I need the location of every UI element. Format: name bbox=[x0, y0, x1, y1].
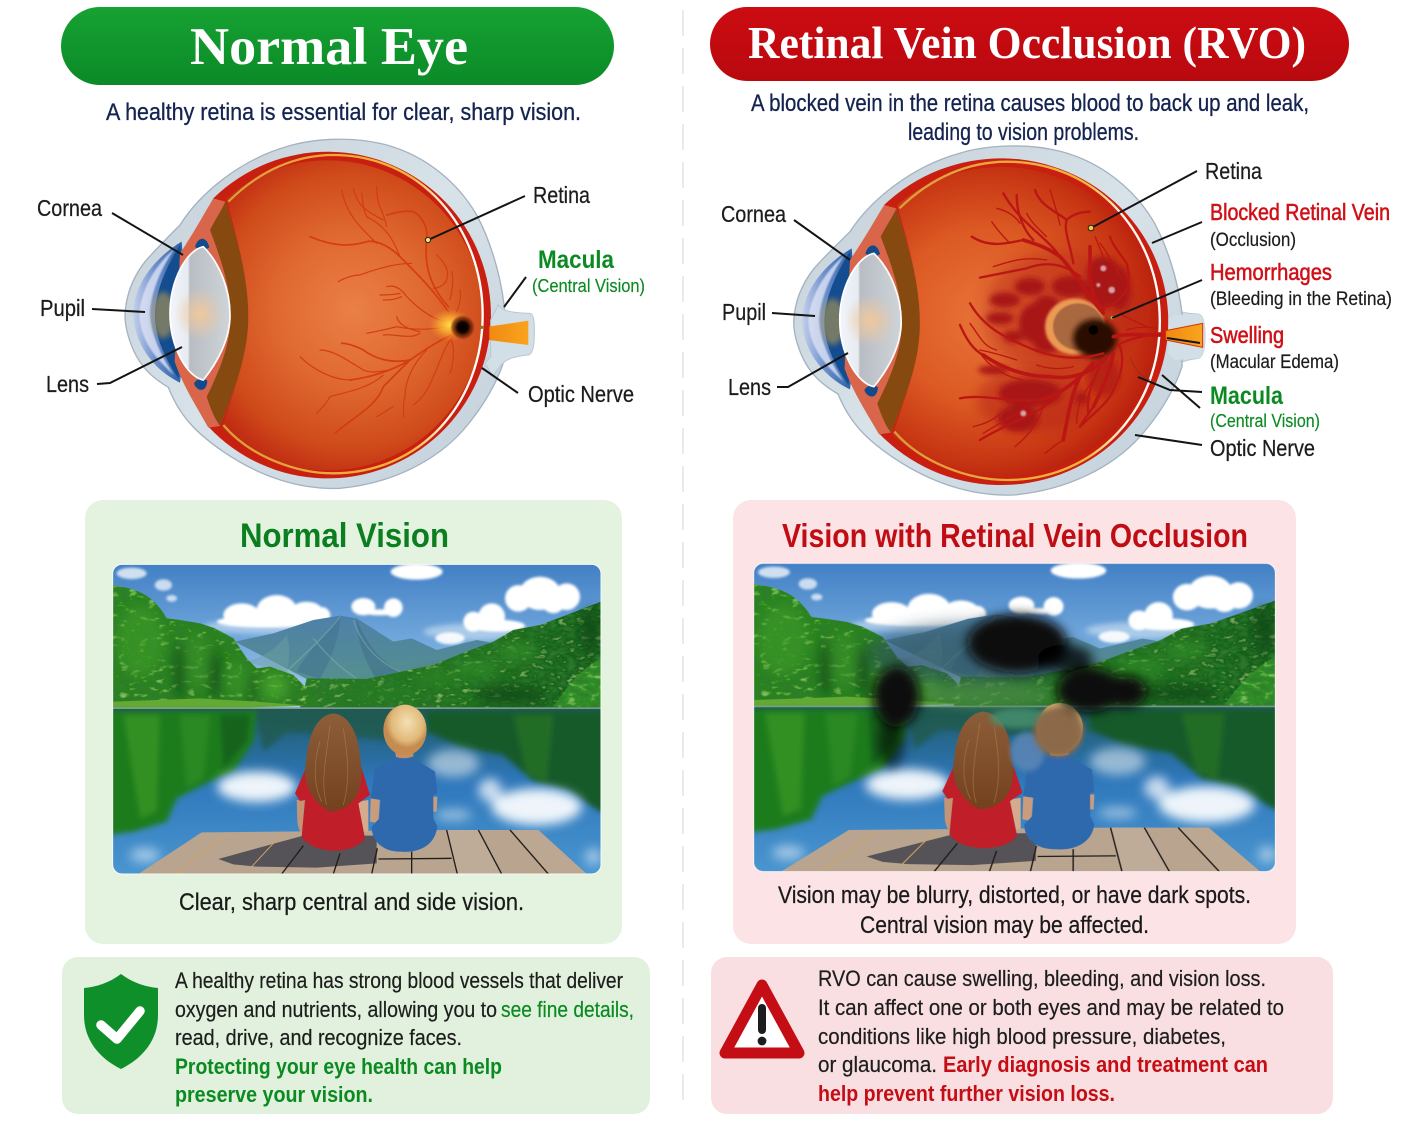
labels: normal eye bbox=[37, 182, 645, 407]
macular edema patch bbox=[1045, 299, 1117, 358]
subtitle: RVO: leading to vision problems. bbox=[908, 119, 1139, 146]
caption: Central vision may be affected. bbox=[860, 912, 1149, 939]
labels: RVO eye bbox=[721, 158, 1392, 461]
subtitle: normal eye: A healthy retina is essential for clear, sharp vision. bbox=[106, 99, 581, 126]
title: Normal Eye: Normal Eye bbox=[190, 18, 468, 76]
label: Cornea bbox=[721, 201, 850, 260]
icon: green shield with check bbox=[84, 974, 158, 1069]
label: Retina: Retina bbox=[1205, 158, 1262, 184]
callout: RVO warning bbox=[711, 957, 1333, 1114]
text block: conditions like high blood pressure, diabetes, bbox=[818, 1024, 1226, 1049]
label: Blocked Retinal Vein bbox=[1152, 199, 1390, 251]
text block: Protecting your eye health can help bbox=[175, 1054, 502, 1079]
label: Lens: Lens bbox=[46, 371, 89, 397]
optic nerve stump bbox=[485, 305, 534, 377]
diagram: normal eye cross-section bbox=[125, 139, 534, 488]
label: Macula bbox=[504, 246, 645, 307]
text block: RVO can cause swelling, bleeding, and vision loss. bbox=[818, 966, 1266, 991]
caption: Clear, sharp central and side vision. bbox=[179, 889, 524, 916]
red halo bbox=[983, 250, 1143, 377]
macula bbox=[428, 308, 475, 342]
heading: Vision with Retinal Vein Occlusion: Vision with Retinal Vein Occlusion bbox=[782, 517, 1248, 554]
label: Optic Nerve: Optic Nerve bbox=[1210, 435, 1315, 461]
blurred head bbox=[1034, 707, 1083, 757]
label: Hemorrhages: Hemorrhages bbox=[1210, 259, 1332, 285]
subtitle: RVO: A blocked vein in the retina causes blood to back up and leak, bbox=[751, 90, 1309, 117]
retinal damage detail bbox=[960, 190, 1160, 453]
label: Pupil: Pupil bbox=[722, 299, 766, 325]
mountain haze bbox=[866, 623, 1072, 687]
caption bbox=[778, 882, 1251, 939]
label: Pupil: Pupil bbox=[40, 295, 85, 321]
label: Lens bbox=[46, 347, 182, 397]
text block: Early diagnosis and treatment can bbox=[943, 1052, 1268, 1077]
dark scotomas bbox=[873, 614, 1147, 768]
panel: normal vision bbox=[80, 500, 633, 944]
label: Pupil bbox=[722, 299, 815, 325]
label: Swelling: Swelling bbox=[1210, 322, 1284, 348]
photo: lake with dark blurred spots bbox=[753, 562, 1276, 872]
text block: see fine details, bbox=[501, 997, 634, 1022]
label: Lens bbox=[728, 353, 848, 400]
label: Macula: Macula bbox=[1210, 382, 1284, 410]
subtitle: RVO bbox=[751, 90, 1309, 146]
label: Optic Nerve bbox=[1135, 435, 1315, 461]
label: Optic Nerve bbox=[482, 368, 634, 407]
label: Macula: (Central Vision) bbox=[1210, 411, 1320, 431]
text block: preserve your vision. bbox=[175, 1082, 373, 1107]
text block: help prevent further vision loss. bbox=[818, 1081, 1115, 1106]
optic nerve stump bbox=[1157, 303, 1205, 380]
icon: warning triangle bbox=[725, 985, 799, 1053]
pale exudates bbox=[1020, 265, 1115, 416]
engorged vessels bbox=[960, 190, 1160, 453]
text block bbox=[818, 966, 1284, 1106]
label: Cornea: Cornea bbox=[37, 195, 102, 221]
label: Cornea bbox=[37, 195, 183, 255]
label: Lens: Lens bbox=[728, 374, 771, 400]
label: Swelling bbox=[1167, 322, 1339, 373]
heading: Normal Vision: Normal Vision bbox=[240, 517, 449, 555]
label: Pupil bbox=[40, 295, 145, 321]
label: Macula bbox=[1138, 375, 1320, 431]
text block: A healthy retina has strong blood vessels that deliver bbox=[175, 968, 623, 993]
label: Macula: Macula bbox=[538, 246, 615, 274]
callout: healthy retina bbox=[62, 957, 650, 1114]
panel: vision with RVO bbox=[719, 500, 1310, 944]
label: Swelling: (Macular Edema) bbox=[1210, 352, 1339, 373]
photo: children at a clear lake bbox=[112, 564, 602, 874]
label: Retina bbox=[1088, 158, 1262, 231]
retinal vessels bbox=[300, 187, 460, 433]
diagram: RVO eye cross-section bbox=[794, 146, 1205, 495]
text block: or glaucoma. bbox=[818, 1052, 937, 1077]
label: Retina bbox=[425, 182, 590, 243]
text block: read, drive, and recognize faces. bbox=[175, 1025, 462, 1050]
title: Retinal Vein Occlusion: Retinal Vein Occlusion (RVO) bbox=[748, 17, 1306, 68]
label: Cornea: Cornea bbox=[721, 201, 786, 227]
text block: oxygen and nutrients, allowing you to bbox=[175, 997, 497, 1022]
title: Normal Eye bbox=[61, 7, 614, 85]
text block bbox=[175, 968, 634, 1107]
label: Retina: Retina bbox=[533, 182, 590, 208]
text block: It can affect one or both eyes and may be related to bbox=[818, 995, 1284, 1020]
label: Hemorrhages bbox=[1112, 259, 1392, 318]
caption: Vision may be blurry, distorted, or have dark spots. bbox=[778, 882, 1251, 909]
title: Retinal Vein Occlusion bbox=[710, 7, 1349, 81]
hemorrhages bbox=[978, 257, 1131, 432]
label: Optic Nerve: Optic Nerve bbox=[528, 381, 634, 407]
label: Macula: (Central Vision) bbox=[532, 276, 645, 296]
label: Blocked Retinal Vein: (Occlusion) bbox=[1210, 230, 1296, 251]
